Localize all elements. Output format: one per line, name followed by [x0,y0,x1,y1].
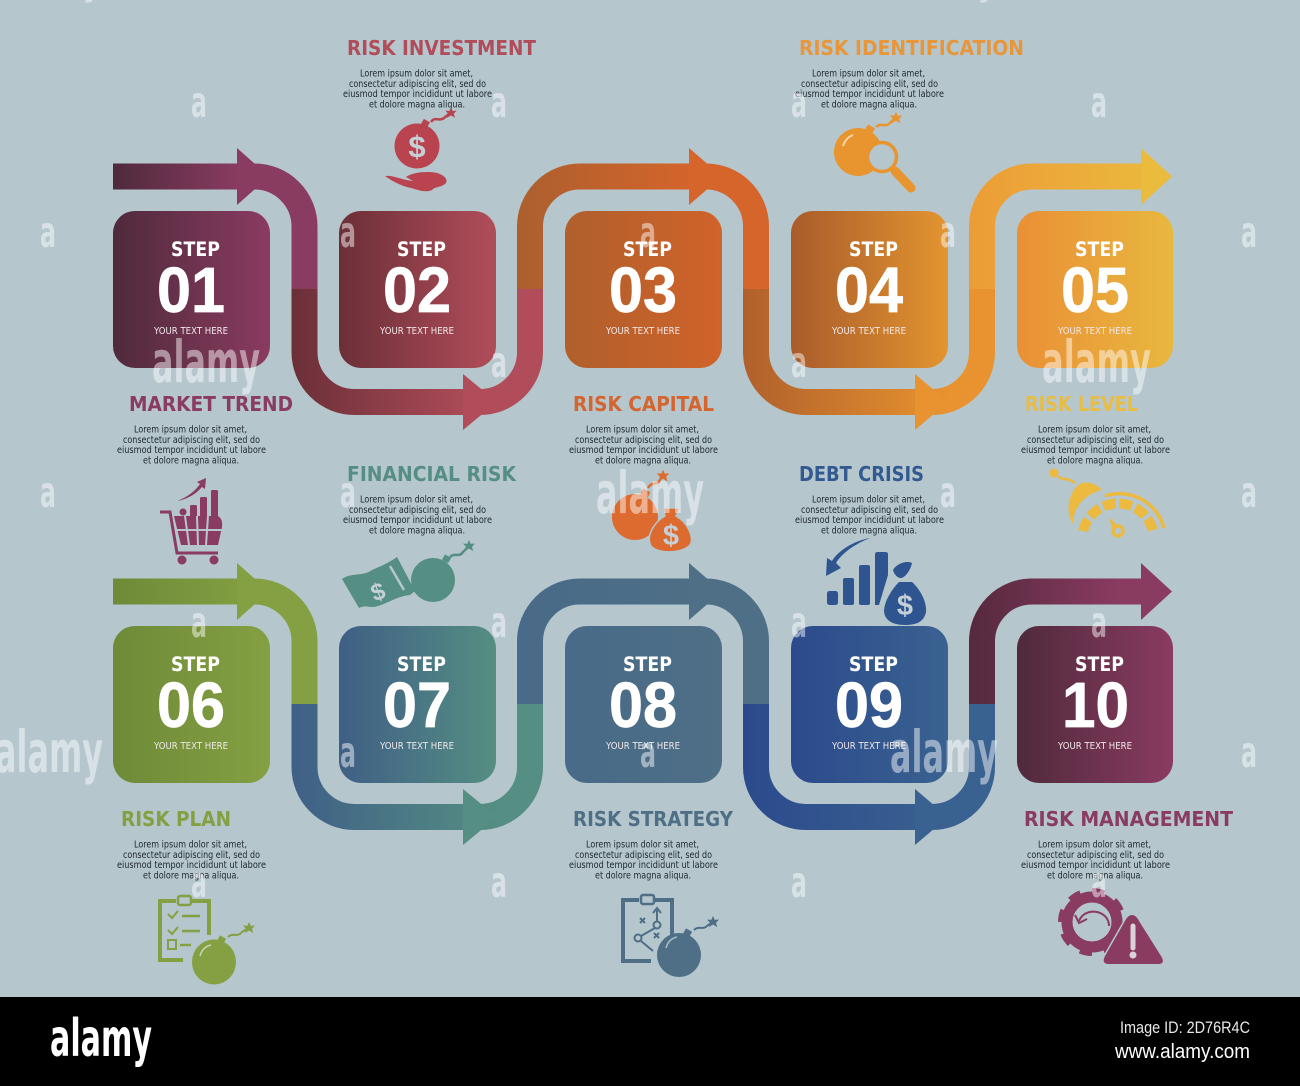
text block: risk level: eiusmod tempor incididunt ut labore [1021,445,1170,456]
step 09 box [791,626,948,783]
text block: risk capital: Lorem ipsum dolor sit amet, [586,424,699,436]
heading: risk identification: RISK IDENTIFICATION [799,36,1024,60]
arrow segment 10 [982,563,1172,704]
text block: risk strategy: et dolore magna aliqua. [595,870,691,882]
watermarks: a [491,78,507,128]
step 01 box: 01 [157,254,225,326]
text block: risk capital [569,424,718,466]
arrow segment 4 [756,289,982,430]
watermarks: a [191,858,207,908]
icon: gear and warning triangle [1063,893,1163,964]
icon: money and bomb [342,540,475,608]
step 04 box: STEP [849,238,898,261]
text block: market trend: Lorem ipsum dolor sit amet, [134,424,247,436]
icon: risk level gauge [1050,468,1164,536]
text block: debt crisis: eiusmod tempor incididunt ut labore [795,515,944,526]
step 03 box: YOUR TEXT HERE [605,326,680,337]
text block: financial risk: et dolore magna aliqua. [369,526,465,536]
text block: risk plan: eiusmod tempor incididunt ut labore [117,860,266,871]
text block: risk strategy: consectetur adipiscing elit, sed do [575,850,712,861]
text block: risk investment [343,68,492,110]
step 05 box [1017,211,1173,368]
step 06 box: YOUR TEXT HERE [153,741,228,752]
text block: market trend: consectetur adipiscing elit, sed do [123,435,260,446]
watermarks: alamy [890,718,998,786]
heading: risk plan: RISK PLAN [121,807,231,831]
heading: market trend: MARKET TREND [129,392,293,416]
watermarks: a [640,728,656,778]
arrow segment 1 [113,148,304,289]
step 10 box: STEP [1075,653,1124,676]
heading: risk investment: RISK INVESTMENT [347,36,536,60]
step 04 box [791,211,948,368]
text block: financial risk: eiusmod tempor incididunt ut labore [343,515,492,526]
text block: risk investment: eiusmod tempor incididunt ut labore [343,89,492,100]
step 10 box [1017,626,1173,783]
text block: market trend: et dolore magna aliqua. [143,456,239,466]
watermarks: alamy [0,718,103,786]
text block: risk plan: et dolore magna aliqua. [143,870,239,882]
text block: financial risk [343,494,492,536]
bottom flow arrow [113,563,1172,845]
text block: debt crisis: consectetur adipiscing elit, sed do [801,505,938,516]
watermarks: a [791,78,807,128]
text block: risk management: consectetur adipiscing elit, sed do [1027,850,1164,861]
step 05 box: YOUR TEXT HERE [1057,326,1132,337]
text block: debt crisis [795,494,944,536]
arrow segment 7 [304,704,530,845]
step 02 box: STEP [397,238,446,261]
watermarks: a [640,208,656,258]
text block: financial risk: consectetur adipiscing elit, sed do [349,505,486,516]
step 06 box [113,626,270,783]
step 05 box: STEP [1075,238,1124,261]
step 06 box: 06 [157,669,225,741]
icon: bomb with dollar over hand [385,107,457,191]
arrow segment 2 [304,289,530,430]
step 08 box: YOUR TEXT HERE [605,741,680,752]
text block: risk identification [795,68,944,110]
text block: risk level: consectetur adipiscing elit, sed do [1027,435,1164,446]
watermarks: a [340,728,356,778]
step 08 box: 08 [609,669,677,741]
text block: risk identification: Lorem ipsum dolor sit amet, [812,68,925,80]
step 03 box: STEP [623,238,672,261]
top flow arrow [113,148,1172,430]
text block: risk strategy: Lorem ipsum dolor sit amet, [586,840,699,850]
watermarks: alamy [596,459,704,527]
icon: clipboard checklist and bomb [160,896,255,984]
step 03 box: 03 [609,254,677,326]
step 03 box [565,211,722,368]
text block: risk identification: eiusmod tempor incididunt ut labore [795,89,944,100]
text block: risk plan [117,840,266,882]
text block: risk identification: consectetur adipiscing elit, sed do [801,79,938,90]
step 01 box: STEP [171,238,220,261]
icon: falling chart and money bag [826,538,926,625]
arrow segment 3 [530,148,756,289]
text block: risk level: Lorem ipsum dolor sit amet, [1038,424,1151,436]
footer image id: Image ID: 2D76R4C [1120,1018,1250,1037]
icon: strategy clipboard and bomb [623,895,719,977]
step 06 box: STEP [171,653,220,676]
watermarks: a [1091,598,1107,648]
watermarks: a [791,858,807,908]
text block: risk identification: et dolore magna aliqua. [821,100,917,110]
text block: risk investment: Lorem ipsum dolor sit amet, [360,68,473,80]
watermarks: a [940,208,956,258]
watermarks: a [40,468,56,518]
text block: risk management: et dolore magna aliqua. [1047,870,1143,882]
heading: risk management: RISK MANAGEMENT [1024,807,1233,831]
icon: money and bomb: $ [367,577,390,607]
step 02 box [339,211,496,368]
text block: debt crisis: Lorem ipsum dolor sit amet, [812,494,925,506]
arrow segment 8 [530,563,756,704]
text block: risk investment: et dolore magna aliqua. [369,100,465,110]
text block: risk capital: consectetur adipiscing elit, sed do [575,435,712,446]
heading: debt crisis: DEBT CRISIS [799,462,924,486]
step 04 box: 04 [835,254,903,326]
text block: debt crisis: et dolore magna aliqua. [821,526,917,536]
step 07 box: 07 [383,669,451,741]
step 07 box [339,626,496,783]
step 09 box: STEP [849,653,898,676]
text block: risk plan: Lorem ipsum dolor sit amet, [134,840,247,850]
icon: shopping cart with growth bars [160,478,222,564]
footer bar [0,997,1300,1086]
text block: risk level: et dolore magna aliqua. [1047,456,1143,466]
text block: market trend: eiusmod tempor incididunt ut labore [117,445,266,456]
heading: risk strategy: RISK STRATEGY [573,807,734,831]
watermarks: a [491,598,507,648]
watermarks: a [1241,468,1257,518]
watermarks: a [791,338,807,388]
heading: risk capital: RISK CAPITAL [573,392,714,416]
step 05 box: 05 [1061,254,1129,326]
step 07 box: YOUR TEXT HERE [379,741,454,752]
arrow segment 6 [113,563,304,704]
icon: bomb with dollar over hand: $ [408,129,426,164]
watermarks: a [491,858,507,908]
watermarks: alamy [1042,328,1151,396]
text block: risk strategy [569,840,718,882]
watermarks: a [1091,858,1107,908]
text block: risk plan: consectetur adipiscing elit, sed do [123,850,260,861]
watermarks: a [940,468,956,518]
icon: capital bomb and money bag [612,470,691,552]
text block: risk management: Lorem ipsum dolor sit amet, [1038,840,1151,850]
text block: risk management [1021,840,1170,882]
text block: market trend [117,424,266,466]
footer logo: alamy [50,1009,152,1069]
step 08 box [565,626,722,783]
watermarks: alamy [152,328,260,396]
icon: bomb with magnifier [834,112,911,188]
watermarks: a [191,598,207,648]
watermarks: a [1241,728,1257,778]
text block: risk level [1021,424,1170,466]
text block: risk management: eiusmod tempor incididunt ut labore [1021,860,1170,871]
step 09 box: YOUR TEXT HERE [831,741,906,752]
heading: risk level: RISK LEVEL [1025,392,1138,416]
watermarks: a [1091,78,1107,128]
watermarks: a [1241,208,1257,258]
step 01 box [113,211,270,368]
footer url: www.alamy.com [1114,1041,1250,1063]
step 02 box: 02 [383,254,451,326]
heading: financial risk: FINANCIAL RISK [347,462,517,486]
text block: risk investment: consectetur adipiscing elit, sed do [349,79,486,90]
text block: risk capital: eiusmod tempor incididunt ut labore [569,445,718,456]
step 04 box: YOUR TEXT HERE [831,326,906,337]
text block: risk capital: et dolore magna aliqua. [595,456,691,466]
watermarks: a [340,468,356,518]
watermarks: a [491,338,507,388]
step 08 box: STEP [623,653,672,676]
arrow segment 5 [982,148,1172,289]
step 10 box: 10 [1062,669,1129,741]
text block: financial risk: Lorem ipsum dolor sit amet, [360,494,473,506]
watermarks: a [191,78,207,128]
step 02 box: YOUR TEXT HERE [379,326,454,337]
watermarks: a [340,208,356,258]
text block: risk strategy: eiusmod tempor incididunt ut labore [569,860,718,871]
icon: capital bomb and money bag: $ [663,520,679,552]
step 07 box: STEP [397,653,446,676]
step 01 box: YOUR TEXT HERE [153,326,228,337]
watermarks: a [791,598,807,648]
step 09 box: 09 [835,669,903,741]
icon: falling chart and money bag: $ [897,590,913,622]
arrow segment 9 [756,704,982,845]
step 10 box: YOUR TEXT HERE [1057,741,1132,752]
watermarks: a [40,208,56,258]
